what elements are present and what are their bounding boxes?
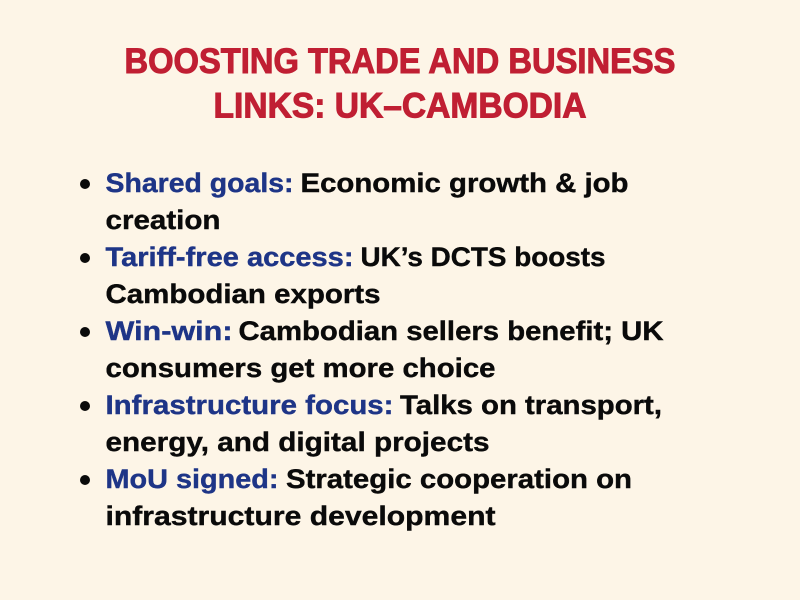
item: shared goals: creation bbox=[106, 205, 220, 235]
bullet list bbox=[80, 168, 664, 531]
item: MoU signed: Strategic cooperation on bbox=[286, 464, 632, 494]
item: MoU signed: infrastructure development bbox=[106, 501, 496, 531]
title bbox=[124, 41, 676, 126]
item: MoU signed: MoU signed: bbox=[106, 464, 278, 494]
item: infrastructure focus: energy, and digital projects bbox=[106, 427, 490, 457]
item: infrastructure focus: Talks on transport, bbox=[400, 390, 662, 420]
title: BOOSTING TRADE AND BUSINESS bbox=[124, 41, 676, 81]
item: infrastructure focus bbox=[80, 390, 662, 457]
item: MoU signed bbox=[80, 464, 632, 531]
item: tariff-free access: Cambodian exports bbox=[106, 279, 380, 309]
item: tariff-free access bbox=[80, 242, 606, 309]
item: win-win bbox=[80, 316, 664, 383]
item: shared goals bbox=[80, 168, 628, 235]
item: shared goals: Economic growth & job bbox=[300, 168, 628, 198]
item: tariff-free access: UK’s DCTS boosts bbox=[360, 242, 606, 272]
title: LINKS: UK–CAMBODIA bbox=[214, 86, 586, 126]
item: win-win: Win-win: bbox=[106, 316, 232, 346]
item: win-win: Cambodian sellers benefit; UK bbox=[238, 316, 664, 346]
item: infrastructure focus: Infrastructure focus: bbox=[106, 390, 394, 420]
item: tariff-free access: Tariff-free access: bbox=[106, 242, 354, 272]
item: win-win: consumers get more choice bbox=[106, 353, 496, 383]
item: shared goals: Shared goals: bbox=[106, 168, 294, 198]
